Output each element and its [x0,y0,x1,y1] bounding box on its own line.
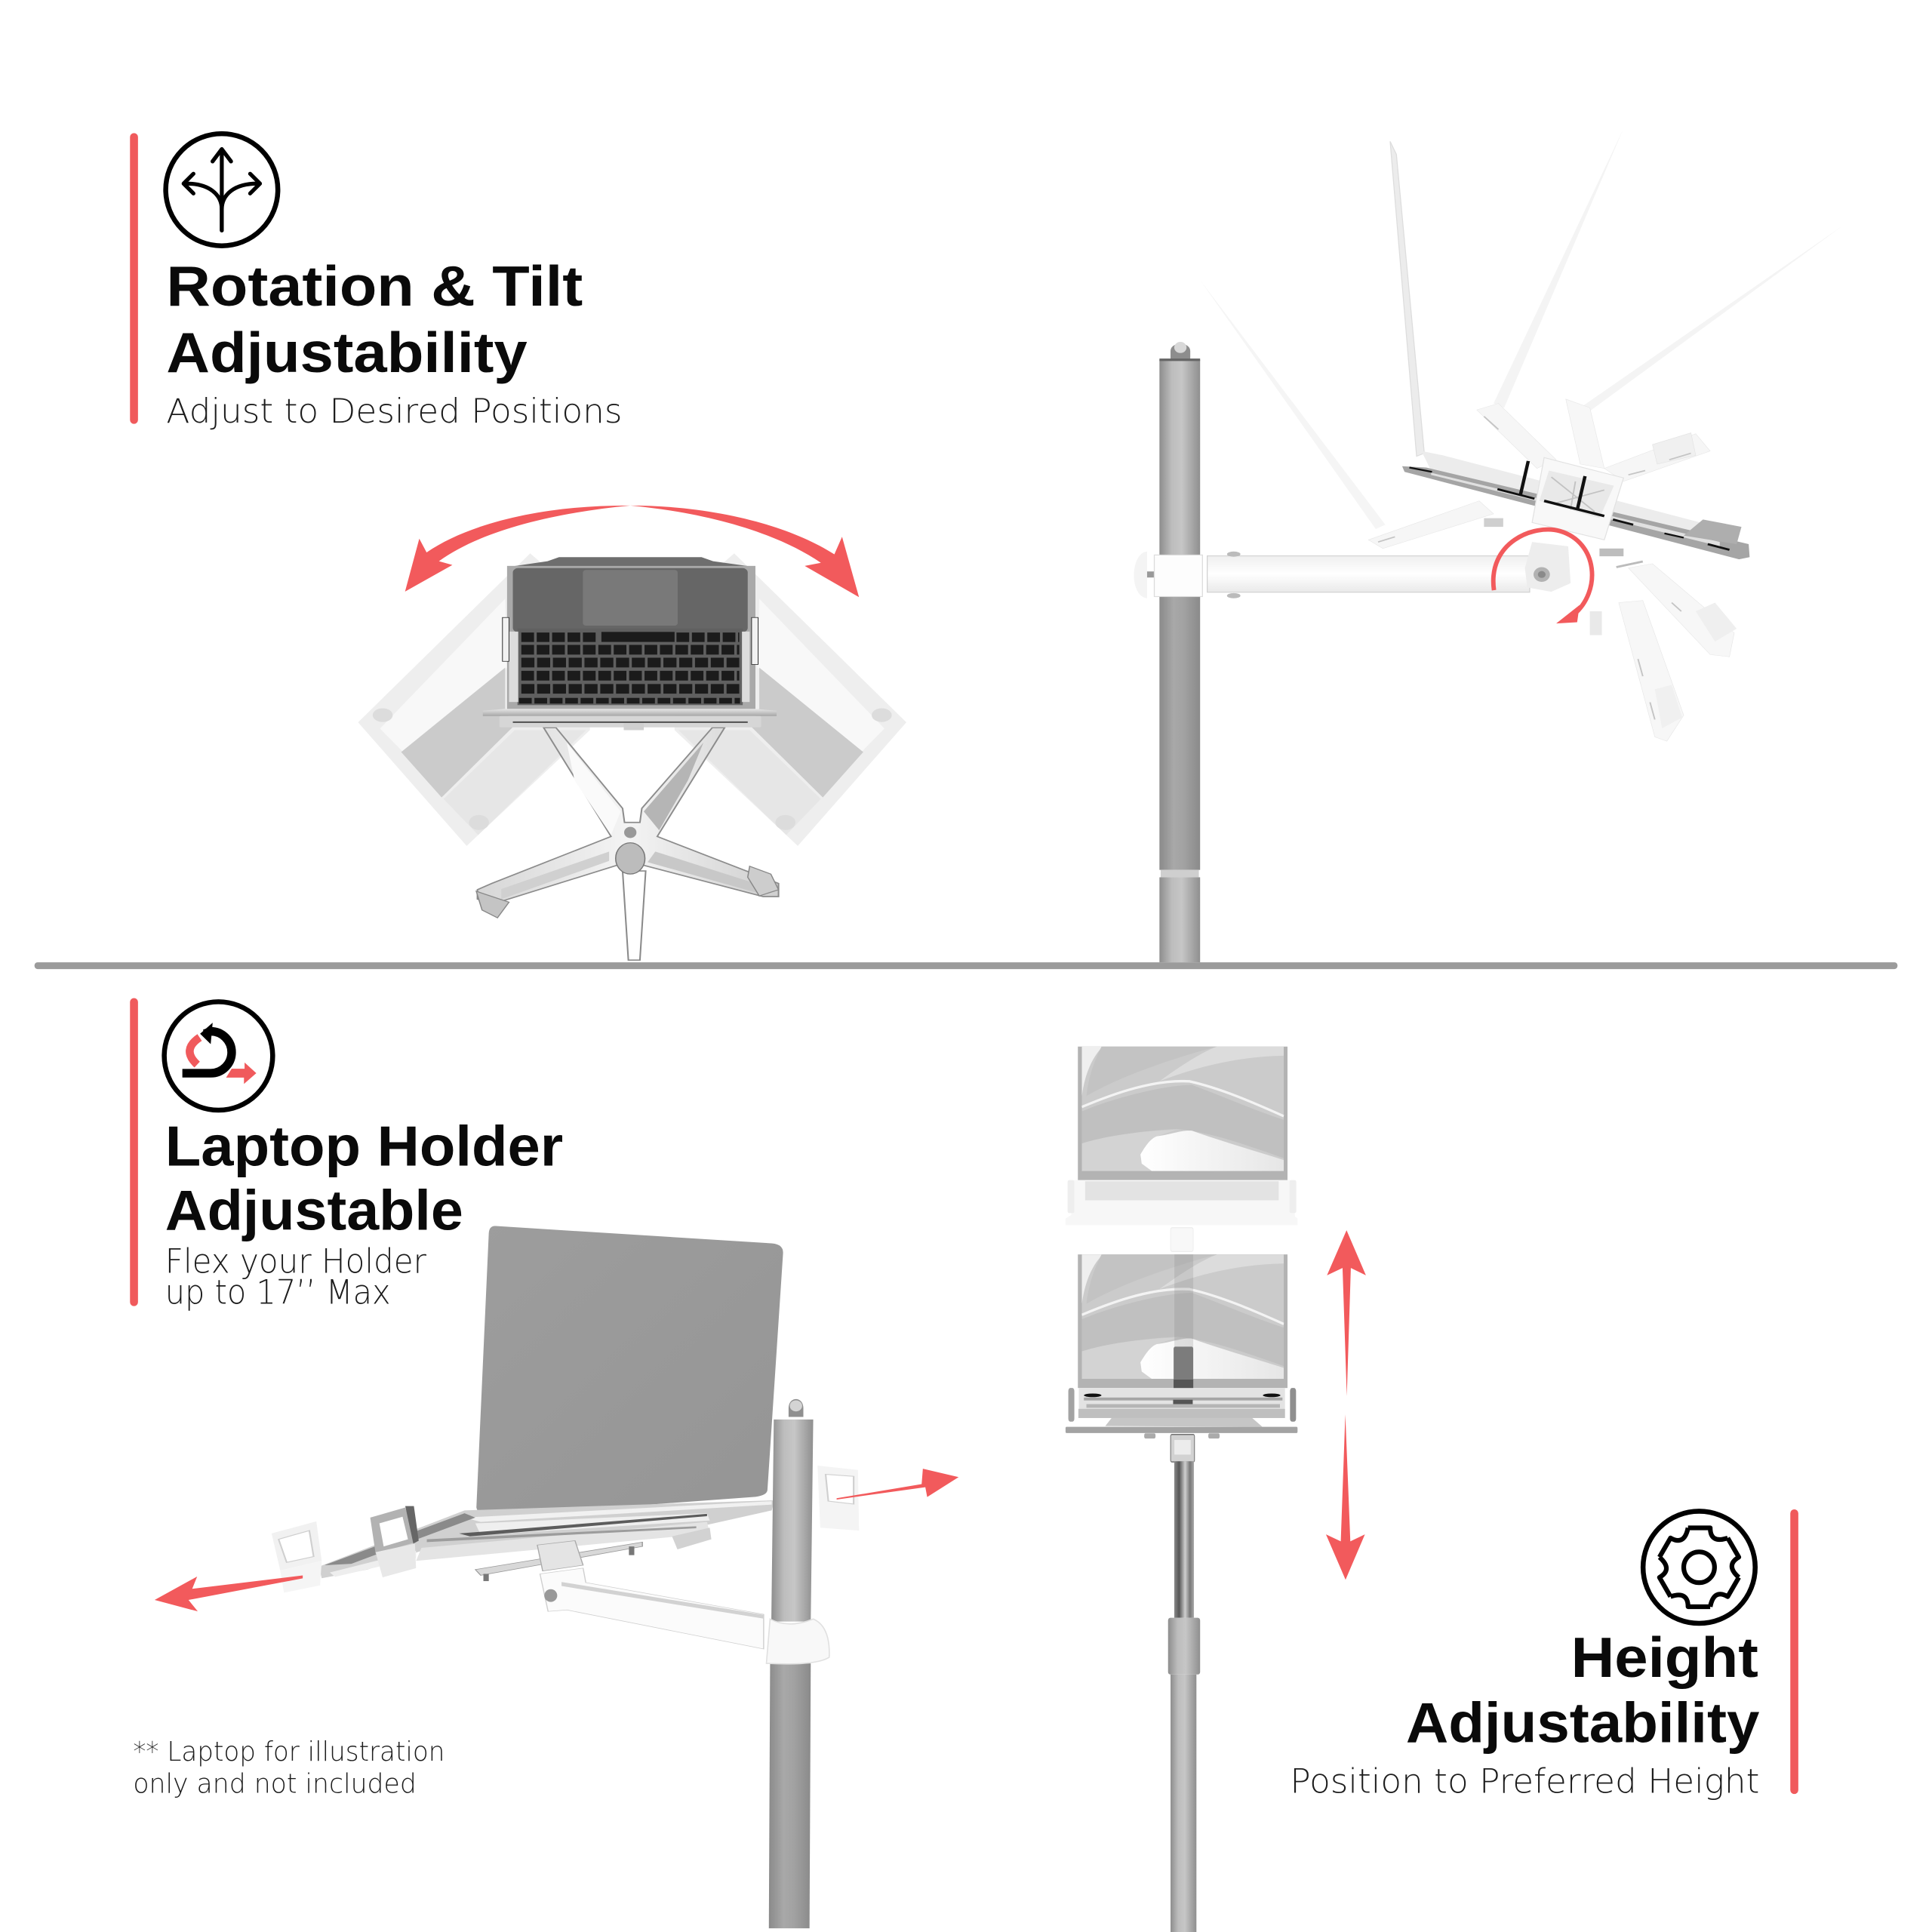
heading: Height [1571,1626,1758,1689]
stand star arms [478,728,779,904]
panel: rotation and tilt heading block [130,133,622,431]
arrow: width left [155,1576,303,1611]
icon: gear [1643,1511,1755,1623]
scattered screws [1484,518,1503,527]
note line one: ** Laptop for illustration [133,1737,445,1767]
collar [1168,1618,1200,1675]
tray [483,709,777,716]
divider line [35,962,1897,969]
arrow: curved double arrow [405,506,859,597]
hub [624,827,636,838]
illustration: laptop holder width [272,1226,859,1928]
heading second line: Adjustability [1406,1691,1760,1755]
lower pole [1171,1675,1196,1932]
illustration: height adjustment [1066,1047,1297,1932]
subheading: Adjust to Desired Positions [166,392,622,431]
main tray [1421,451,1700,540]
subheading: Position to Preferred Height [1290,1763,1759,1801]
mount [1171,1435,1195,1462]
tray layers [319,1500,774,1578]
note [133,1737,445,1800]
accent bar [130,133,138,424]
heading: Rotation & Tilt [166,254,583,318]
pole nut [789,1399,803,1417]
pole [1174,1461,1194,1618]
main laptop holder [509,557,753,567]
panel: height adjustability heading block [1290,1509,1798,1801]
square holder frame [371,1508,416,1554]
upper ghost tray [1066,1180,1297,1225]
lower tray [1079,1388,1285,1418]
clamp [767,1619,829,1664]
ghost laptop lids [1200,280,1386,529]
ghost pole through screen [1174,1254,1193,1348]
center bracket [1532,457,1623,540]
pivot bracket [1525,542,1571,592]
ghost laptop right [671,553,906,846]
arrow: height up and down [1326,1230,1366,1580]
ghost left holder [272,1521,321,1571]
cross bar with screws [475,1542,642,1575]
ghost trays [1368,501,1494,549]
accent bar [130,998,138,1306]
subheading line one: Flex your Holder [165,1243,427,1281]
lower laptop [1078,1254,1287,1388]
pole [1159,360,1200,594]
pole nut [1171,344,1190,360]
heading second line: Adjustability [166,321,528,384]
icon: three way arrows [166,134,278,246]
pole [771,1420,814,1622]
black slots [1409,461,1730,550]
swivel bracket [537,1540,583,1571]
arm [540,1568,764,1649]
clamp [1134,552,1147,598]
upper ghost laptop [1078,1047,1287,1180]
heading: Laptop Holder [165,1114,563,1177]
panel: laptop holder heading block [130,998,563,1312]
ghost right holder [817,1466,859,1531]
side strips and clips [509,632,518,702]
illustration: side view tilting laptop [1134,128,1842,962]
arm [1208,556,1530,592]
arrow: width right [837,1469,958,1500]
icon: rotate and shift [165,1001,272,1110]
arrow: circular rotation [1494,530,1592,623]
laptop lid [476,1226,783,1515]
ghost laptop left [358,553,594,846]
subheading line two: up to 17’’ Max [165,1273,391,1312]
note line two: only and not included [133,1769,417,1800]
illustration: front view tilt left and right [358,553,906,960]
stand pole [623,871,646,960]
heading second line: Adjustable [165,1178,463,1241]
keyboard keys [519,632,740,701]
accent bar [1790,1509,1798,1794]
